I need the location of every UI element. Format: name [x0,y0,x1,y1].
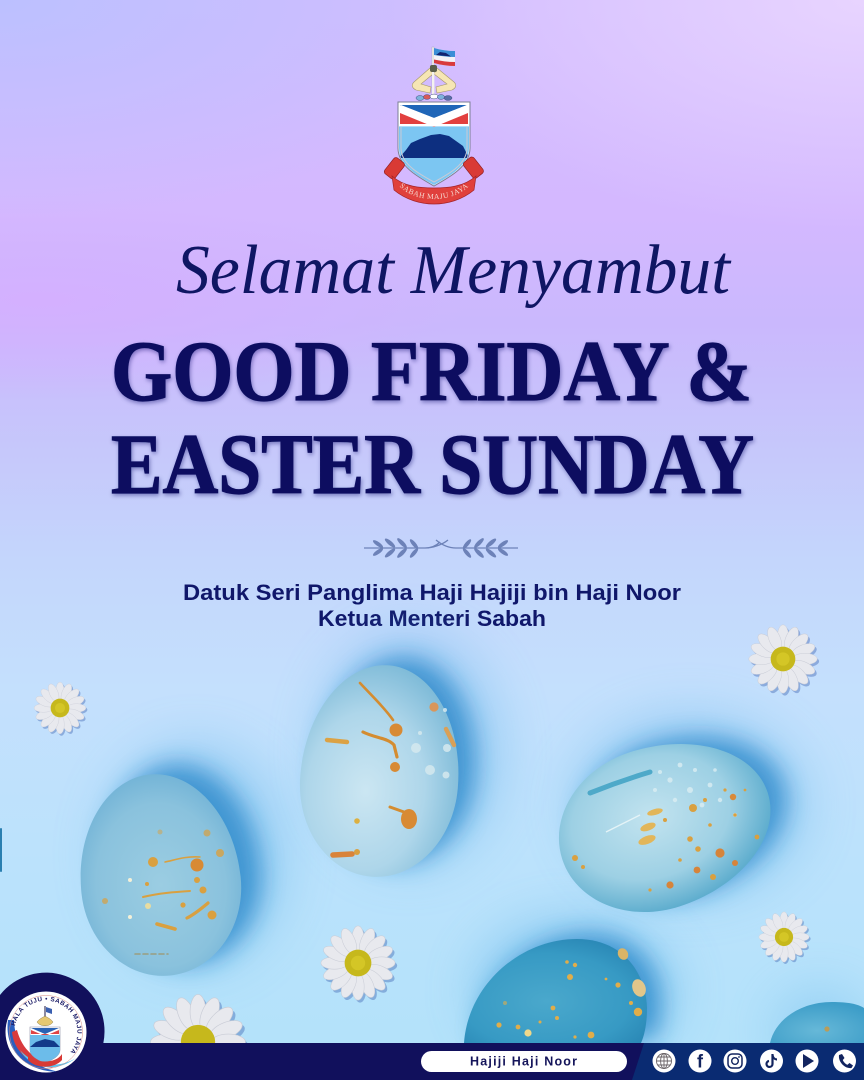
swoosh: red and blue ring [8,1020,76,1072]
title: Good Friday & Easter Sunday [111,323,754,512]
badge: Hala Tuju logo [0,972,104,1072]
icon: mini crest [28,1006,62,1067]
icon: flag [432,47,455,93]
egg: centre top with gold streaks [292,659,468,883]
icon: daisy top right [749,625,819,696]
search pill: Hajiji Haji Noor [421,1051,627,1072]
icon: shield [398,102,470,186]
icon: daisy centre bottom [321,926,397,1003]
text block: name and position [183,580,681,631]
egg: bottom right partial [770,1002,864,1043]
icon: daisy bottom cropped [150,994,248,1059]
icon: youtube play [796,1050,818,1072]
icon: daisy right [759,912,811,964]
icon: crossed arms [412,68,456,93]
icon: facebook: f [697,1052,704,1072]
icon: ribbon with motto [384,156,484,204]
icon: daisy left [34,682,87,736]
egg: bottom teal with gold splashes [464,939,648,1043]
icon: facebook [688,1050,712,1072]
icon: website globe [652,1050,676,1072]
icon: ribbon with motto: SABAH MAJU JAYA [400,183,468,200]
script heading: Selamat Menyambut: Selamat Menyambut [176,232,731,309]
icon: phone [833,1050,856,1072]
search pill: Hajiji Haji Noor: Hajiji Haji Noor [470,1054,577,1068]
crest: Sabah coat of arms [384,46,484,204]
footer bar [0,1043,864,1080]
title: Good Friday & Easter Sunday: GOOD FRIDAY & [111,323,752,419]
text block: name and position: Ketua Menteri Sabah [318,606,546,631]
icon: instagram [724,1050,746,1072]
text block: name and position: Datuk Seri Panglima Haji Hajiji bin Haji Noor [183,580,681,605]
badge text: motto ring: HALA TUJU • SABAH MAJU JAYA [10,996,82,1054]
icon: wreath [416,94,452,100]
icon: tiktok [760,1050,783,1072]
egg: right with gold specks [537,716,793,936]
egg shadows [0,635,864,1070]
title: Good Friday & Easter Sunday: EASTER SUNDAY [111,416,754,512]
egg: left with gold veins [70,766,250,984]
icon: leaf divider [364,537,518,559]
